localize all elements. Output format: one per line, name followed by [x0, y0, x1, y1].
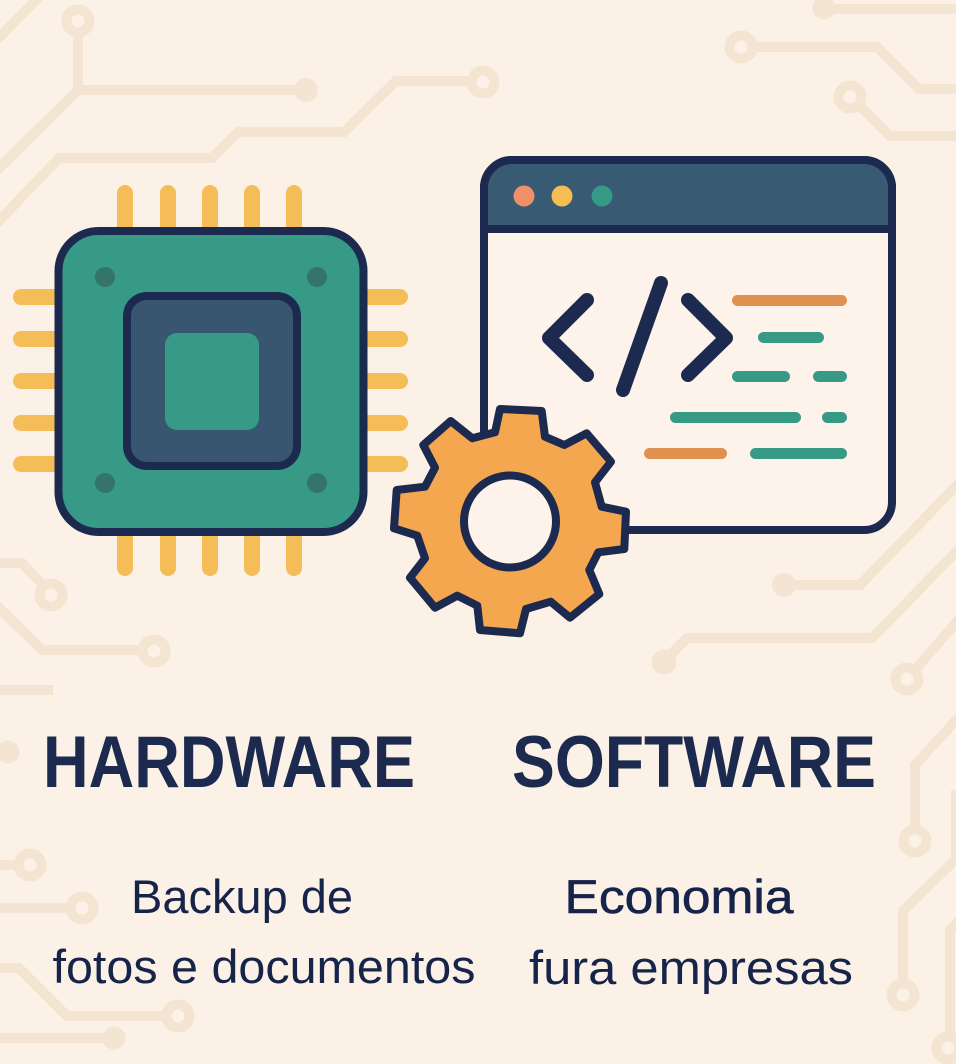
- text block: hardware use: fotos e documentos: [52, 940, 476, 993]
- text block: hardware use: Backup de: [131, 870, 353, 923]
- text block: hardware use: [52, 870, 476, 993]
- chip pins: [13, 185, 408, 576]
- chip core: [127, 296, 297, 466]
- icon: software code window: [484, 160, 892, 530]
- chip body: [58, 231, 364, 532]
- text block: software use: fura empresas: [529, 941, 853, 994]
- code lines: [644, 295, 847, 459]
- window title bar: [484, 160, 892, 229]
- icon: gear: [394, 409, 626, 633]
- heading: hardware: HARDWARE: [43, 722, 415, 803]
- icon: hardware chip: [13, 185, 408, 576]
- text block: software use: [529, 870, 853, 994]
- code brackets: [549, 283, 726, 390]
- text block: software use: Economia: [564, 870, 794, 923]
- heading: software: SOFTWARE: [512, 722, 876, 803]
